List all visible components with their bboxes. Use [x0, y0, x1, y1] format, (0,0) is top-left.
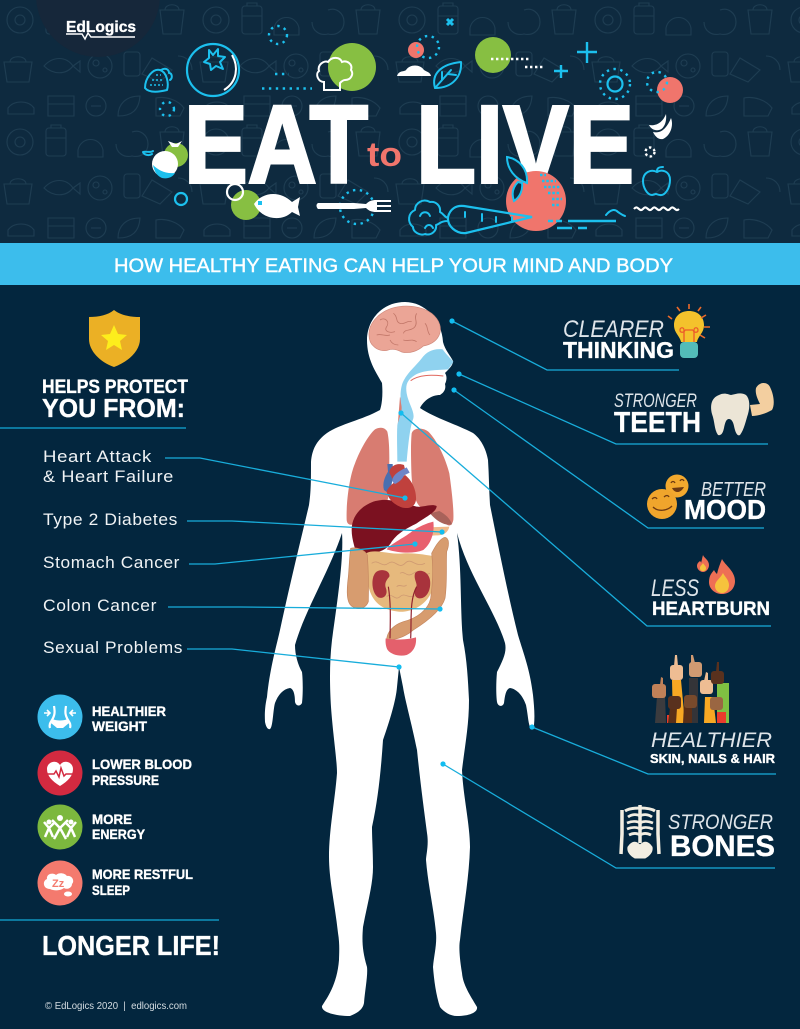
panel: clearer thinking [563, 304, 710, 363]
icon: light bulb [668, 304, 710, 358]
icon: leaf [434, 62, 461, 88]
line: stronger teeth [456, 371, 768, 444]
heading: helps protect: HELPS PROTECT [42, 376, 188, 398]
organ: kidneys [372, 570, 430, 598]
heading: longer life: LONGER LIFE! [42, 930, 220, 961]
panel: stronger teeth: STRONGER [614, 391, 697, 412]
panel: less heartburn: LESS [651, 575, 699, 602]
icon: raised thumbs up hands [652, 655, 729, 723]
organ: airway and esophagus [397, 349, 453, 462]
organ: lungs [347, 428, 453, 525]
human body figure [265, 302, 534, 1016]
icon: more restful sleep: Zz [52, 878, 65, 890]
panel: healthier skin, nails and hair: SKIN, NAILS & HAIR [650, 752, 775, 766]
icon: flames [697, 555, 735, 594]
footer credit: © EdLogics 2020 | edlogics.com [45, 1001, 187, 1012]
panel: better mood: MOOD [684, 494, 766, 525]
panel: better mood [647, 474, 766, 525]
organ: large intestine [347, 537, 448, 640]
icon: cyan squiggle [606, 210, 625, 216]
panel: healthier skin, nails and hair [650, 655, 775, 766]
icon: dotted burst left [160, 102, 174, 116]
panel: stronger teeth [614, 383, 774, 439]
icon: fish on green circle [227, 184, 300, 220]
divider line [0, 427, 186, 429]
icon: coral circle with dots [647, 72, 683, 103]
text: more restful sleep: SLEEP [92, 883, 130, 898]
organ: stomach [387, 522, 434, 553]
list item: heart attack: & Heart Failure [43, 467, 174, 486]
icon: sun [600, 69, 630, 99]
text: more energy: MORE [92, 812, 132, 827]
line: colon cancer [168, 606, 443, 612]
text: lower blood pressure: PRESSURE [92, 773, 159, 788]
icon: lower blood pressure [38, 750, 82, 796]
list item: stomach cancer: Stomach Cancer [43, 553, 180, 572]
panel: stronger bones [621, 805, 775, 863]
line: less heartburn [398, 410, 771, 626]
line: clearer thinking [449, 318, 679, 370]
dotted lines [262, 74, 312, 88]
header panel with food pattern [0, 0, 800, 243]
icon: carrot with greens [409, 201, 532, 235]
icon: banana [649, 114, 672, 139]
icon: broccoli on green circle [317, 43, 376, 91]
icon: cyan ring [175, 193, 187, 205]
banner [0, 243, 800, 285]
icon: green circle [475, 37, 511, 73]
organ: bladder [386, 637, 416, 656]
icon: coral fruit with leaves [506, 157, 566, 231]
panel: less heartburn [651, 555, 770, 620]
list item: heart attack: Heart Attack [43, 447, 152, 466]
dashes [548, 221, 616, 228]
icon: white dots [646, 148, 654, 156]
organs: drawn in 3x local coordinates [347, 306, 453, 656]
icon: waves [634, 207, 679, 210]
white dotted lines [491, 59, 545, 67]
line: stomach cancer [189, 541, 418, 564]
panel: clearer thinking: CLEARER [563, 316, 664, 343]
text: healthier weight [92, 704, 166, 734]
organ: gallbladder area [430, 511, 452, 525]
organ: pancreas [421, 527, 449, 537]
title: EAT to LIVE [184, 84, 634, 206]
icon: more restful sleep [38, 860, 82, 906]
icon: healthier weight [38, 694, 82, 740]
organ: liver [352, 500, 437, 555]
icon: fork [316, 190, 391, 224]
list item: colon cancer: Colon Cancer [43, 596, 157, 615]
logo: EdLogics [36, 0, 160, 57]
panel: benefits list [0, 694, 220, 961]
text: more energy: ENERGY [92, 827, 145, 842]
icon: coral circle and cloud [397, 36, 439, 76]
text: more restful sleep [92, 867, 193, 898]
icon: more energy [38, 804, 82, 850]
line: stronger bones [440, 761, 775, 868]
body silhouette [265, 302, 534, 1016]
list item: type 2 diabetes: Type 2 Diabetes [43, 510, 178, 529]
panel: helps protect you from [0, 310, 188, 657]
title: EAT to LIVE: LIVE [416, 84, 634, 206]
icon: skeleton [621, 805, 659, 858]
panel: clearer thinking: THINKING [563, 337, 674, 363]
header food icons [143, 19, 683, 235]
heading: you from: YOU FROM: [42, 393, 185, 423]
panel: stronger bones: STRONGER [668, 811, 773, 834]
text: lower blood pressure: LOWER BLOOD [92, 757, 192, 772]
banner: HOW HEALTHY EATING CAN HELP YOUR MIND AND BODY [114, 255, 673, 277]
text: healthier weight: HEALTHIER [92, 704, 166, 719]
organ: small intestine [366, 551, 438, 612]
panel: stronger teeth: TEETH [614, 407, 701, 439]
icon: apple outline [643, 167, 670, 195]
divider line [0, 919, 219, 921]
title: EAT to LIVE: to [367, 136, 402, 174]
title: EAT to LIVE: EAT [184, 84, 368, 206]
organ: ureters [388, 587, 417, 638]
line: sexual problems [187, 649, 402, 670]
icon: tooth with arm [711, 383, 774, 435]
text: more restful sleep: MORE RESTFUL [92, 867, 193, 882]
line: diabetes [187, 521, 445, 535]
left callout lines [165, 458, 445, 670]
icon: smiling faces [647, 474, 688, 519]
icon: tomato [187, 44, 239, 96]
logo: EdLogics: EdLogics [66, 19, 136, 36]
text: healthier weight: WEIGHT [92, 719, 148, 734]
panel: stronger bones: BONES [670, 830, 775, 863]
line: heart attack [165, 458, 408, 501]
right callout lines [398, 318, 776, 868]
panel: healthier skin, nails and hair: HEALTHIER [651, 729, 772, 752]
icon: dotted circle top [269, 26, 287, 44]
line: healthier skin [529, 724, 776, 774]
panel: better mood: BETTER [701, 479, 766, 501]
line: better mood [451, 387, 764, 528]
icon: cross [447, 19, 453, 25]
list item: sexual problems: Sexual Problems [43, 638, 183, 657]
text: more energy [92, 812, 145, 842]
organ: heart [383, 464, 416, 508]
icon: plus signs [554, 42, 597, 78]
icon: strawberry [145, 69, 172, 92]
panel: less heartburn: HEARTBURN [652, 599, 770, 620]
list item: heart attack [43, 447, 174, 486]
text: lower blood pressure [92, 757, 192, 788]
organ: brain [369, 306, 440, 353]
icon: apple and lemon [143, 141, 188, 178]
icon: shield [89, 310, 140, 367]
